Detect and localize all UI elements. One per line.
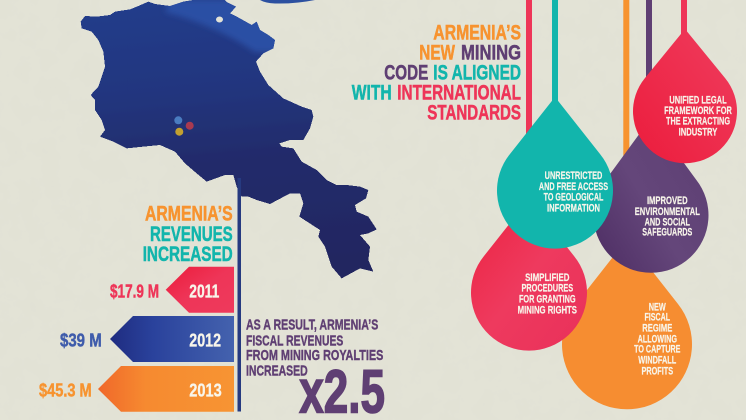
drop: unified legal framework (red) [633,0,737,163]
map dot: yellow [175,128,183,136]
heading: new mining code: NEW [419,40,455,64]
heading: Armenia's revenues increased [143,202,233,266]
heading: new mining code: MINING [461,40,521,64]
drop: new fiscal regime (orange) [562,0,692,409]
heading: new mining code: STANDARDS [427,100,521,124]
heading: new mining code: ARMENIA’S [433,20,521,44]
bar: 2011 revenue: 2011 [189,280,219,301]
drop: new fiscal regime (orange): REGIME [642,322,673,334]
drop: simplified procedures (pink) [471,0,587,351]
drop: new fiscal regime (orange): WINDFALL [638,355,676,367]
drop: environmental safeguards (purple) [594,0,708,273]
text: fiscal revenues result: INCREASED [246,363,308,379]
bar: 2012 revenue [60,316,234,362]
drop: simplified procedures (pink): MINING RIGHTS [518,304,577,316]
map dot: blue [174,116,182,124]
bar: 2013 revenue [39,366,234,412]
bar: 2012 revenue: $39 M [60,330,102,351]
heading: Armenia's revenues increased: ARMENIA’S [145,202,233,226]
text: fiscal revenues result: FROM MINING ROYALTIES [246,348,383,364]
drop: geological information (teal): TO GEOLOGICAL [544,192,603,204]
drop: simplified procedures (pink): SIMPLIFIED [525,272,569,284]
bar: 2013 revenue: 2013 [189,379,222,400]
drop: simplified procedures (pink): FOR GRANTING [519,294,576,306]
vertical divider line [238,178,241,412]
drop: new fiscal regime (orange): PROFITS [641,366,673,378]
drop: environmental safeguards (purple): AND SOCIAL [645,217,690,229]
drop: geological information (teal): AND FREE ACCESS [539,181,608,193]
drop: geological information (teal) [497,0,613,249]
heading: Armenia's revenues increased: REVENUES [150,222,233,246]
drop: geological information (teal): UNRESTRICTED [545,170,602,182]
text: fiscal revenues result [246,317,383,379]
drop: new fiscal regime (orange): ALLOWING [638,333,677,345]
drop: geological information (teal): INFORMATION [547,203,600,215]
map fragment at top edge [260,0,315,4]
heading: new mining code: INTERNATIONAL [397,80,521,104]
heading: new mining code: WITH [352,80,392,104]
bar: 2012 revenue: 2012 [189,330,221,351]
drop: new fiscal regime (orange): TO CAPTURE [634,344,681,356]
bar: 2013 revenue: $45.3 M [39,380,92,401]
drop: simplified procedures (pink): PROCEDURES [521,283,573,295]
heading: new mining code: IS ALIGNED [433,60,521,84]
heading: new mining code: CODE [384,60,428,84]
drop: unified legal framework (red): INDUSTRY [679,126,718,138]
heading: Armenia's revenues increased: INCREASED [143,242,233,266]
text: fiscal revenues result: AS A RESULT, ARMENIA’S [246,317,378,333]
map dot: red [186,122,194,130]
map: Armenia [81,0,377,278]
drop: new fiscal regime (orange): NEW [649,301,666,313]
drop: environmental safeguards (purple): ENVIRONMENTAL [635,206,700,218]
bar: 2011 revenue [110,267,234,313]
drop: environmental safeguards (purple): IMPROVED [647,195,688,207]
drop: environmental safeguards (purple): SAFEGUARDS [642,227,693,239]
heading: new mining code [352,20,521,124]
drop: new fiscal regime (orange): FISCAL [644,312,670,324]
bar: 2011 revenue: $17.9 M [110,280,159,301]
text: fiscal revenues result: FISCAL REVENUES [246,333,343,349]
